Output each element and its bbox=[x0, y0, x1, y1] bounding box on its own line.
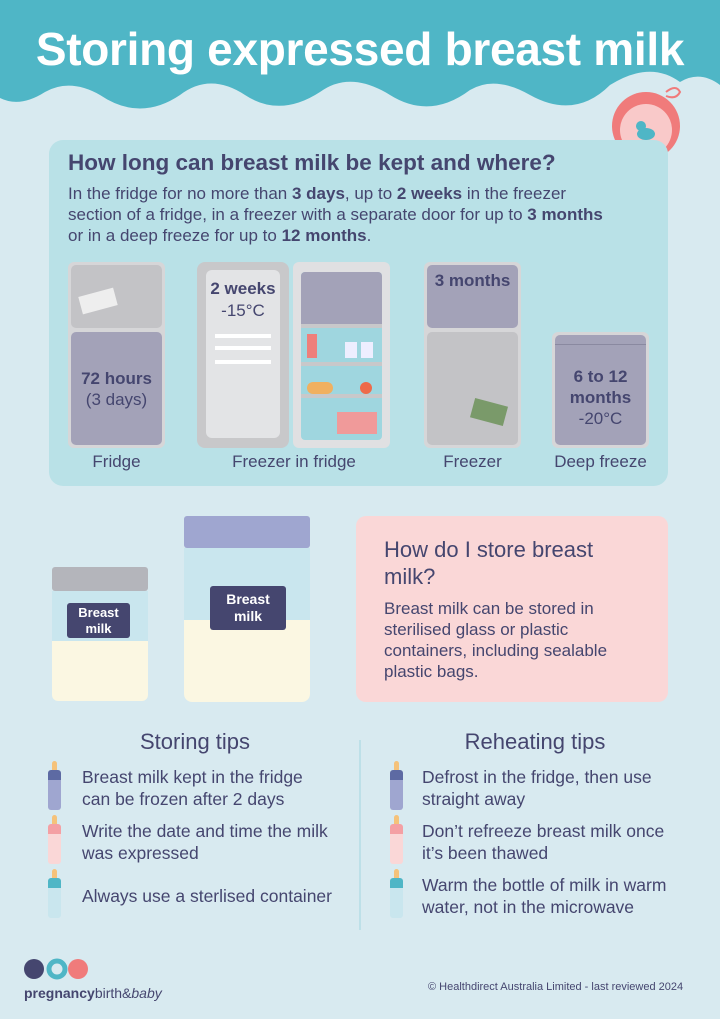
big jar: milk bbox=[234, 608, 262, 624]
fridge: (3 days) bbox=[86, 390, 147, 409]
labels: Fridge bbox=[92, 452, 141, 471]
big jar: Breast bbox=[226, 591, 270, 607]
deep freeze: -20°C bbox=[579, 409, 622, 428]
deep freeze: months bbox=[570, 388, 631, 407]
reheating tips: straight away bbox=[422, 789, 525, 809]
small jar: milk bbox=[85, 621, 112, 636]
deep freeze bbox=[552, 332, 649, 448]
freezer in fridge: -15°C bbox=[221, 301, 265, 320]
freezer in fridge: 2 weeks bbox=[210, 279, 276, 298]
labels bbox=[92, 452, 647, 471]
panel: how do I store: Breast milk can be stored in bbox=[384, 599, 594, 618]
freezer bbox=[424, 262, 521, 448]
storing tips bbox=[48, 729, 332, 918]
freezer: 3 months bbox=[435, 271, 510, 290]
storing tips: Always use a sterlised container bbox=[82, 886, 332, 906]
fridge bbox=[68, 262, 165, 448]
reheating tips: Reheating tips bbox=[465, 729, 605, 754]
deep freeze: 6 to 12 bbox=[574, 367, 627, 386]
storing tips: Storing tips bbox=[140, 729, 250, 754]
text block: section of a fridge, in a freezer with a separate door for up to 3 months bbox=[68, 205, 603, 224]
freezer in fridge bbox=[197, 262, 390, 448]
panel: how do I store: plastic bags. bbox=[384, 662, 478, 681]
panel: how do I store: milk? bbox=[384, 564, 435, 589]
big jar bbox=[184, 516, 310, 702]
reheating tips: Defrost in the fridge, then use bbox=[422, 767, 652, 787]
logo: pregnancybirth&baby bbox=[24, 985, 162, 1001]
title: Storing expressed breast milk bbox=[36, 23, 684, 75]
icon: bib bbox=[612, 87, 681, 152]
reheating tips: water, not in the microwave bbox=[422, 897, 634, 917]
text block bbox=[68, 184, 603, 245]
copyright: © Healthdirect Australia Limited - last reviewed 2024 bbox=[428, 981, 683, 993]
logo bbox=[24, 958, 162, 1001]
storing tips: Write the date and time the milk bbox=[82, 821, 328, 841]
fridge: 72 hours bbox=[81, 369, 152, 388]
panel: how do I store: sterilised glass or plastic bbox=[384, 620, 568, 639]
divider bbox=[359, 740, 361, 930]
storing tips: can be frozen after 2 days bbox=[82, 789, 284, 809]
small jar: Breast bbox=[78, 605, 119, 620]
reheating tips: Warm the bottle of milk in warm bbox=[422, 875, 666, 895]
labels: Freezer in fridge bbox=[232, 452, 356, 471]
labels: Deep freeze bbox=[554, 452, 647, 471]
reheating tips: Don’t refreeze breast milk once bbox=[422, 821, 664, 841]
reheating tips: it’s been thawed bbox=[422, 843, 548, 863]
storing tips: Breast milk kept in the fridge bbox=[82, 767, 303, 787]
heading: How long can breast milk be kept and where? bbox=[68, 150, 556, 175]
panel: how long bbox=[49, 140, 668, 486]
text block: or in a deep freeze for up to 12 months. bbox=[68, 226, 371, 245]
header bbox=[0, 0, 720, 108]
panel: how do I store: How do I store breast bbox=[384, 537, 593, 562]
reheating tips bbox=[390, 729, 666, 918]
panel: how do I store: containers, including sealable bbox=[384, 641, 607, 660]
panel: how do I store bbox=[356, 516, 668, 702]
storing tips: was expressed bbox=[82, 843, 199, 863]
text block: In the fridge for no more than 3 days, up to 2 weeks in the freezer bbox=[68, 184, 566, 203]
labels: Freezer bbox=[443, 452, 502, 471]
small jar bbox=[52, 567, 148, 701]
